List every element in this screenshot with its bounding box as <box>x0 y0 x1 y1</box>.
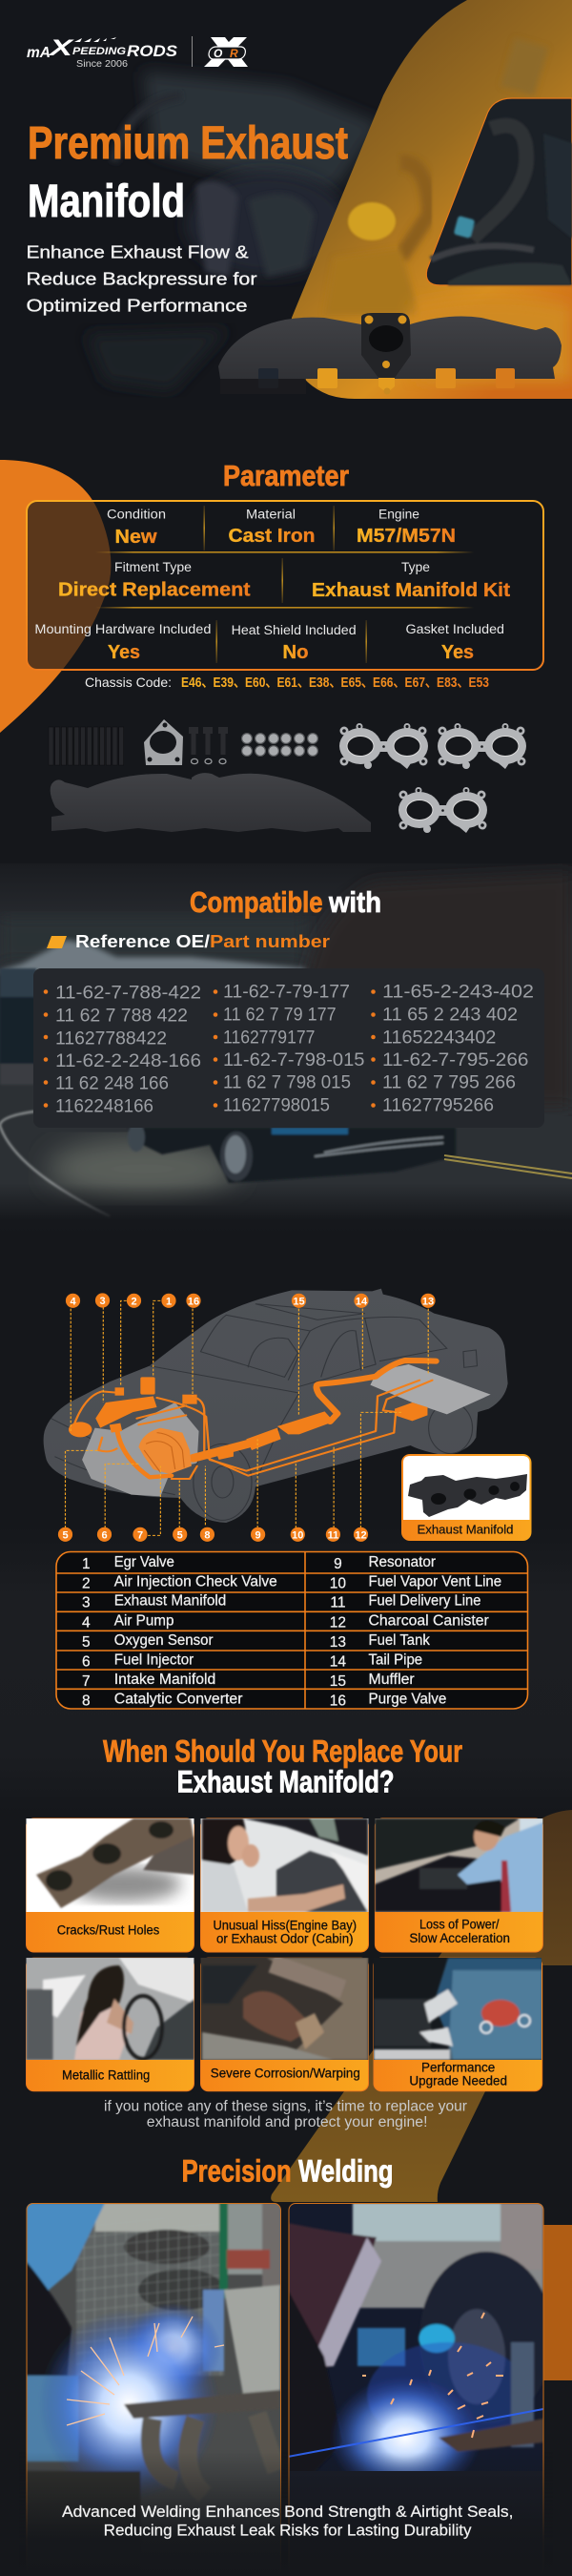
parameter heading: Parameter <box>223 459 349 492</box>
engine <box>357 508 456 547</box>
top badges: 13 <box>422 1296 434 1307</box>
intake manifold <box>138 1428 192 1474</box>
decorative orange rectangle at right <box>539 2225 572 2380</box>
top badges: 16 <box>188 1296 199 1307</box>
engine: Engine <box>378 508 419 521</box>
column 2 numbers <box>223 982 365 1116</box>
left numbers <box>82 1556 91 1709</box>
car under list <box>128 1123 456 1183</box>
column 1 numbers: 11-62-2-248-166 <box>55 1050 201 1071</box>
column 2 numbers: 11 62 7 798 015 <box>223 1072 351 1093</box>
column 3 numbers: 11-65-2-243-402 <box>382 982 534 1003</box>
welding photo 2 <box>288 2203 543 2547</box>
reference OE subheading: Part number <box>210 932 330 951</box>
material: Material <box>246 508 296 521</box>
row 1 dividers <box>204 506 367 663</box>
right names: Tail Pipe <box>368 1652 422 1668</box>
welding caption: Reducing Exhaust Leak Risks for Lasting Durability <box>104 2523 472 2540</box>
textured section background <box>0 1527 572 1813</box>
column 1 numbers: 11 62 248 166 <box>55 1073 169 1094</box>
top badges <box>66 1293 436 1308</box>
closing note <box>104 2098 467 2130</box>
left names: Fuel Injector <box>114 1652 194 1668</box>
brand logo: mA <box>27 45 51 61</box>
condition: New <box>114 527 157 548</box>
charcoal canister <box>395 1402 427 1421</box>
bottom badges <box>58 1527 368 1542</box>
left numbers: 6 <box>82 1653 91 1670</box>
hero panel <box>0 0 572 410</box>
bullets <box>44 989 376 1108</box>
turbo gasket <box>144 719 183 765</box>
kit parts image <box>49 719 526 833</box>
card: performance upgrade: Performance <box>421 2060 495 2074</box>
car diagram <box>44 1289 508 1535</box>
heat shield: Heat Shield Included <box>232 623 357 637</box>
nuts <box>242 734 317 756</box>
welding photo bottom fade <box>19 2452 553 2576</box>
left numbers: 3 <box>82 1595 91 1611</box>
bottom badges: 10 <box>292 1529 303 1541</box>
left numbers: 5 <box>82 1634 91 1651</box>
brand logo: X <box>47 35 75 61</box>
right numbers: 15 <box>330 1673 346 1690</box>
fitment type <box>58 560 251 601</box>
right names: Charcoal Canister <box>368 1612 489 1629</box>
card: loss of power: Slow Acceleration <box>409 1931 510 1945</box>
catalytic, resonator, muffler <box>215 1411 334 1460</box>
bolts <box>189 727 228 755</box>
brand logo <box>27 35 248 70</box>
card: cracks / rust holes: Cracks/Rust Holes <box>57 1922 159 1937</box>
right names: Purge Valve <box>368 1691 446 1707</box>
exhaust and fuel system <box>73 1361 436 1479</box>
condition <box>107 508 166 548</box>
top badges: 3 <box>99 1296 106 1307</box>
column 3 numbers <box>382 982 534 1116</box>
snow mountain <box>0 940 305 973</box>
card: metallic rattling: Metallic Rattling <box>62 2067 150 2082</box>
hero manifold product image <box>218 313 562 395</box>
hero orange accent shape <box>290 0 572 399</box>
dark hill on right <box>305 873 572 1107</box>
column 3 numbers: 11 65 2 243 402 <box>382 1005 518 1026</box>
right numbers: 16 <box>330 1693 346 1709</box>
road surface <box>0 1177 572 1204</box>
gasket <box>406 622 504 663</box>
inset manifold <box>408 1474 527 1517</box>
top badges: 1 <box>166 1296 172 1307</box>
hero engine photo background <box>94 68 374 387</box>
card: loss of power <box>375 1818 543 1952</box>
bottom badges: 11 <box>328 1529 338 1541</box>
bottom badges: 5 <box>177 1529 183 1541</box>
fitment type: Fitment Type <box>114 560 192 574</box>
bottom badges: 12 <box>355 1529 367 1541</box>
studs <box>49 727 124 765</box>
closing note: exhaust manifold and protect your engine! <box>147 2114 428 2130</box>
exhaust manifold inset card <box>401 1454 532 1541</box>
fuel tank <box>370 1364 491 1414</box>
left names <box>114 1554 277 1707</box>
hero subtitle: Enhance Exhaust Flow & <box>27 242 249 262</box>
type: Type <box>401 560 430 574</box>
card: severe corrosion: Severe Corrosion/Warping <box>211 2067 360 2081</box>
bottom badges: 6 <box>101 1529 108 1541</box>
hero subtitle <box>27 242 257 316</box>
inset manifold ports <box>431 1482 520 1505</box>
part number list panel <box>33 968 544 1128</box>
heat shield <box>232 623 357 663</box>
sparks <box>67 2316 224 2425</box>
material: Cast Iron <box>229 526 315 547</box>
card: unusual hiss <box>200 1818 368 1952</box>
card: loss of power: Loss of Power/ <box>419 1918 500 1932</box>
chassis code line: E46、E39、E60、E61、E38、E65、E66、E67、E83、E53 <box>181 675 489 691</box>
engine block <box>82 1402 199 1496</box>
brand logo: RODS <box>127 42 178 60</box>
welding caption: Advanced Welding Enhances Bond Strength & Airtight Seals, <box>62 2503 513 2521</box>
rotary table <box>419 2251 543 2396</box>
welder helmet <box>288 2223 377 2376</box>
exhaust manifold inset card: Exhaust Manifold <box>418 1523 513 1537</box>
diagram number badges <box>58 1293 436 1542</box>
right numbers: 13 <box>330 1634 346 1651</box>
reference OE subheading: Reference OE/ <box>75 932 210 951</box>
column 1 numbers <box>55 983 201 1117</box>
right numbers: 10 <box>330 1575 346 1591</box>
precision welding heading <box>182 2154 393 2189</box>
right numbers: 11 <box>330 1595 345 1611</box>
right names: Fuel Tank <box>368 1632 430 1649</box>
hero inset engine photo <box>426 98 572 285</box>
card: metallic rattling <box>27 1958 194 2091</box>
bottom badges: 7 <box>137 1529 143 1541</box>
decorative brown shape behind cards <box>271 1810 572 2202</box>
decorative orange blob behind parameter <box>0 460 111 733</box>
card: performance upgrade: Upgrade Needed <box>409 2074 507 2088</box>
chassis code line: Chassis Code: <box>85 675 172 690</box>
brand logo: PEEDING <box>72 46 126 57</box>
bottom badges: 9 <box>255 1529 261 1541</box>
replace heading <box>103 1735 462 1799</box>
parts table <box>56 1551 528 1709</box>
welding caption <box>62 2503 513 2540</box>
right numbers: 14 <box>330 1653 346 1670</box>
column 2 numbers: 11-62-7-798-015 <box>223 1049 365 1070</box>
engine: M57/M57N <box>357 526 456 547</box>
gaskets <box>339 723 428 769</box>
right names <box>368 1554 501 1707</box>
welded manifold pipes <box>124 2390 280 2419</box>
column 3 numbers: 11 62 7 795 266 <box>382 1072 516 1093</box>
column 3 numbers: 11627795266 <box>382 1095 494 1116</box>
hero orange shape photo details <box>324 38 572 382</box>
top badges: 14 <box>356 1296 368 1307</box>
car silhouette <box>44 1289 508 1523</box>
column 1 numbers: 11627788422 <box>55 1028 167 1049</box>
column 3 numbers: 11-62-7-795-266 <box>382 1049 528 1070</box>
left names: Air Pump <box>114 1612 174 1629</box>
dashed leader lines <box>65 1300 428 1535</box>
mounting hardware: Mounting Hardware Included <box>34 622 211 636</box>
washers <box>191 758 226 764</box>
card: cracks / rust holes <box>27 1818 194 1952</box>
left names: Egr Valve <box>114 1554 174 1570</box>
type: Exhaust Manifold Kit <box>312 580 510 601</box>
condition: Condition <box>107 508 166 521</box>
top badges: 15 <box>293 1296 305 1307</box>
type <box>312 560 510 601</box>
gasket: Gasket Included <box>406 622 504 636</box>
mounting hardware <box>34 622 211 663</box>
precision welding heading: Precision <box>182 2154 292 2189</box>
hero subtitle: Optimized Performance <box>27 296 248 316</box>
left names: Exhaust Manifold <box>114 1593 226 1610</box>
left numbers: 1 <box>82 1556 91 1572</box>
material <box>229 508 315 547</box>
mounting hardware: Yes <box>108 642 140 663</box>
hero subtitle: Reduce Backpressure for <box>27 269 257 289</box>
left numbers: 8 <box>82 1693 91 1709</box>
mountains and forest <box>0 968 36 1064</box>
bottom badges: 8 <box>204 1529 210 1541</box>
right names: Resonator <box>368 1554 436 1570</box>
left names: Air Injection Check Valve <box>114 1573 277 1589</box>
column 2 numbers: 1162779177 <box>223 1027 315 1048</box>
left names: Catalytic Converter <box>114 1691 242 1707</box>
right names: Muffler <box>368 1672 415 1688</box>
replace heading: Exhaust Manifold? <box>177 1765 395 1799</box>
compatible heading: Compatible <box>190 885 322 919</box>
closing note: if you notice any of these signs, it’s time to replace your <box>104 2098 467 2114</box>
left numbers: 2 <box>82 1575 91 1591</box>
manifold <box>51 773 371 832</box>
sparks <box>362 2313 503 2438</box>
OR X badge: O <box>214 47 223 60</box>
symptom cards <box>27 1818 543 2091</box>
welding photo 1 <box>27 2203 281 2576</box>
column 1 numbers: 1162248166 <box>55 1096 153 1117</box>
OR X badge <box>204 37 248 67</box>
OR X badge: R <box>230 47 238 60</box>
left names: Intake Manifold <box>114 1672 215 1688</box>
column 2 numbers: 11-62-7-79-177 <box>223 982 350 1003</box>
chassis code line <box>85 675 489 691</box>
column 2 numbers: 11 62 7 79 177 <box>223 1005 337 1026</box>
road scene background <box>0 863 572 1236</box>
reference OE subheading <box>47 932 330 951</box>
column 1 numbers: 11 62 7 788 422 <box>55 1006 188 1027</box>
parameter panel <box>27 501 543 670</box>
hero title <box>28 118 348 227</box>
car body lines <box>51 1304 478 1520</box>
right numbers <box>330 1556 346 1709</box>
card: unusual hiss: Unusual Hiss(Engine Bay) <box>214 1919 357 1933</box>
column 3 numbers: 11652243402 <box>382 1027 496 1048</box>
top badges: 4 <box>70 1296 76 1307</box>
right numbers: 9 <box>334 1556 342 1572</box>
card: performance upgrade <box>374 1958 542 2091</box>
card: severe corrosion <box>200 1958 368 2091</box>
heat shield: No <box>282 642 309 663</box>
replace heading: When Should You Replace Your <box>103 1735 462 1769</box>
right names: Fuel Vapor Vent Line <box>368 1573 501 1589</box>
engine parts <box>69 1377 197 1437</box>
checkered flag strokes <box>74 37 116 42</box>
left numbers: 7 <box>82 1673 91 1690</box>
bottom badges: 5 <box>62 1529 69 1541</box>
right numbers: 12 <box>330 1614 346 1631</box>
column 2 numbers: 11627798015 <box>223 1095 330 1116</box>
hero title: Premium Exhaust <box>28 118 348 169</box>
fitment type: Direct Replacement <box>58 580 251 601</box>
column 1 numbers: 11-62-7-788-422 <box>55 983 201 1004</box>
right names: Fuel Delivery Line <box>368 1593 480 1610</box>
precision welding heading: Welding <box>298 2154 393 2189</box>
icon: parallelogram <box>47 936 67 948</box>
gasket: Yes <box>441 642 474 663</box>
left numbers: 4 <box>82 1614 91 1631</box>
left names: Oxygen Sensor <box>114 1632 214 1649</box>
brand logo: Since 2006 <box>76 58 128 70</box>
card: unusual hiss: or Exhaust Odor (Cabin) <box>216 1932 353 1946</box>
yellow road lines <box>444 1155 572 1178</box>
hero title: Manifold <box>28 177 185 227</box>
compatible heading: with <box>328 885 381 919</box>
wire cage <box>76 2218 224 2376</box>
top badges: 2 <box>131 1296 137 1307</box>
